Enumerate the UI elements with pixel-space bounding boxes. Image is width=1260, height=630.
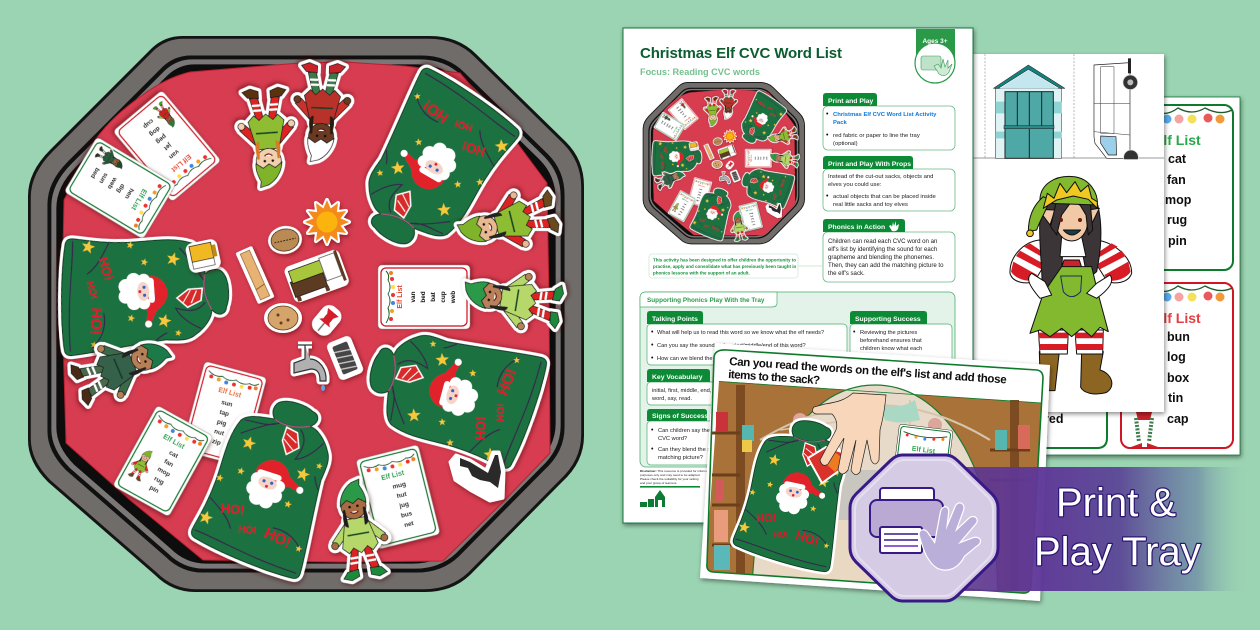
- elf: red tunic: [292, 62, 352, 163]
- activity question: Can you read the words on the elf's list and add those: [729, 355, 1008, 386]
- age badge: Ages 3+: [922, 38, 948, 45]
- panel: phonics in action: Then, they can add the matching picture to: [828, 262, 944, 269]
- disclaimer text: Please check the suitability for your setting: [640, 477, 699, 481]
- sack in scene: HO!: [794, 527, 821, 549]
- sack: left: [56, 228, 232, 356]
- panel: supporting success: children know what each: [860, 346, 922, 352]
- elf list card: red, horizontal: [378, 265, 470, 329]
- panel: talking points: •: [651, 329, 654, 336]
- elf list card: green, top left: dig: [115, 182, 126, 194]
- panel: signs of success: •: [651, 446, 654, 453]
- elf list card: red, top left: Elf List: [169, 152, 192, 173]
- sack: bottom: HO!: [261, 525, 294, 552]
- back page: elf list cards: [1000, 97, 1240, 455]
- disclaimer text: purposes only and may need to be adapted.: [640, 473, 701, 477]
- panel: signs of success: Can children say the sounds in each: [658, 428, 750, 434]
- elf list card: green, bottom right: jug: [398, 501, 410, 510]
- sack: right lower: [356, 316, 549, 472]
- elf list card: red, behind bottom sack: pig: [216, 419, 227, 428]
- elf list card: green, top left: bed: [89, 166, 101, 180]
- title: Christmas Elf CVC Word List: [640, 45, 842, 62]
- elf list card: red, behind bottom sack: tap: [219, 409, 230, 418]
- elf list card: red: Elf List: [1154, 310, 1201, 326]
- panel: key vocabulary: [647, 369, 847, 405]
- panel: supporting success: beforehand ensures that: [860, 338, 922, 344]
- elf list card: green, bottom right: net: [404, 520, 415, 529]
- panel: talking points: What will help us to read this word so we know what the elf needs?: [657, 330, 824, 336]
- panel: print and play: Christmas Elf CVC Word List Activity: [833, 112, 937, 118]
- sack: right lower: HO!: [495, 403, 507, 422]
- panel: key vocabulary: Key Vocabulary: [652, 374, 703, 381]
- disclaimer text: [640, 469, 713, 488]
- activity frame outline: [707, 350, 1043, 593]
- panel: supporting phonics play: Supporting Phonics Play With the Tray: [647, 297, 765, 304]
- elf list card: red: bun: [1167, 330, 1190, 344]
- elf list card: green, partly hidden: [1040, 400, 1107, 448]
- panel: print and play with props: Instead of the cut-out sacks, objects and: [828, 174, 933, 180]
- panel: phonics in action: the elf's sack.: [828, 270, 865, 277]
- elf list card: red, horizontal: Elf List: [397, 285, 404, 309]
- elf list card: green: rug: [1167, 213, 1187, 227]
- red fabric lining: [62, 62, 550, 562]
- panel: signs of success: Signs of Success: [652, 413, 709, 420]
- panel: signs of success: •: [651, 427, 654, 434]
- icon: bread roll: [266, 223, 304, 257]
- elf list card: green, top left: [64, 137, 176, 239]
- elf list card: green, bottom left: cat: [168, 449, 180, 460]
- panel: phonics in action: [823, 219, 955, 282]
- panel: talking points: [647, 311, 847, 365]
- elf list card: green: fan: [1167, 173, 1186, 187]
- elf list card: red: cap: [1167, 412, 1189, 426]
- elf list card: red, top left: jet: [162, 141, 173, 152]
- icon: red pin: [308, 301, 345, 339]
- banner: [950, 467, 1260, 591]
- elf list card: green, top left: sun: [97, 171, 109, 185]
- panel: supporting success: •: [853, 329, 856, 336]
- elf list card: green, bottom left: rug: [153, 475, 165, 487]
- panel: phonics in action: Phonics in Action: [828, 224, 885, 231]
- elf: dark green outfit: [66, 321, 179, 413]
- icon: sun: [305, 200, 349, 244]
- panel: print and play with props: actual objects that can be placed inside: [833, 194, 937, 200]
- elf list card: red, behind bottom sack: nut: [213, 428, 225, 438]
- logo: [640, 490, 665, 507]
- sack: right lower: HO!: [494, 366, 520, 398]
- elf list card: green, bottom left: fan: [163, 458, 174, 469]
- sack in scene: HO!: [773, 529, 789, 539]
- elf: red collar, bottom: [321, 476, 394, 583]
- elf list card: green: [1030, 105, 1233, 270]
- banner title: [1034, 481, 1201, 574]
- elf list card: green, top left: hen: [123, 187, 135, 200]
- elf list card: green, bottom left: pin: [148, 484, 160, 495]
- panel: print and play with props: •: [826, 193, 829, 200]
- panel: print and play with props: [823, 156, 955, 211]
- panel: print and play: Pack: [833, 120, 847, 126]
- elf list card: green, bottom right: Elf List: [381, 470, 406, 482]
- elf list card: red, behind bottom sack: sun: [220, 399, 233, 409]
- panel: talking points: •: [651, 342, 654, 349]
- panel: signs of success: matching picture?: [658, 455, 703, 461]
- panel: talking points: Talking Points: [652, 316, 698, 323]
- tray frame: [28, 36, 584, 592]
- icon: teal building: [993, 65, 1065, 158]
- elf list card in scene: Elf List: [911, 446, 936, 456]
- elf list card: red: [1121, 283, 1233, 448]
- elf list card: green, bottom right: [356, 445, 440, 549]
- tray with printed activity pieces: [28, 36, 584, 592]
- panel: supporting phonics play: [640, 292, 955, 467]
- disclaimer text: and your group of learners.: [640, 481, 677, 485]
- elf list card: red, horizontal: bed: [420, 291, 427, 303]
- sack: top right: HO!: [454, 117, 474, 133]
- sack: top right: HO!: [460, 138, 487, 160]
- panel: print and play with props: Print and Play With Props: [828, 161, 911, 168]
- elf list card: green, bottom left: mop: [156, 466, 171, 479]
- elf list card: red: box: [1167, 371, 1189, 385]
- activity question: items to the sack?: [728, 368, 820, 387]
- icon: bin: [325, 335, 365, 381]
- activity photo card: [700, 343, 1050, 601]
- main document page: [623, 28, 973, 523]
- sack: left: HO!: [95, 255, 117, 282]
- panel: print and play: Print and Play: [828, 98, 874, 105]
- icon: bed: [283, 248, 350, 304]
- icon: yellow mug: [184, 238, 222, 274]
- panel: phonics in action: grapheme and blending the phonemes.: [828, 254, 934, 261]
- elf list card: red, top left: van: [167, 148, 180, 160]
- sack: bottom: [187, 384, 350, 581]
- age badge: [915, 29, 955, 83]
- elf list card: red, top left: dog: [148, 125, 161, 138]
- elf list card: red, horizontal: web: [450, 291, 457, 304]
- elf list card: red, behind bottom sack: zip: [211, 438, 222, 447]
- panel: talking points: How can we blend the sounds?: [657, 356, 735, 362]
- elf list card: green, top left: Elf List: [129, 187, 147, 211]
- elf: green tunic: [235, 86, 299, 189]
- elf list card: green: mop: [1165, 193, 1192, 207]
- icon: van: [1094, 58, 1140, 168]
- elf list card: red, horizontal: van: [410, 291, 417, 303]
- panel: print and play: [823, 93, 955, 150]
- panel: print and play: red fabric or paper to line the tray: [833, 133, 920, 139]
- elf: long dark hair: [453, 183, 562, 262]
- elf list card: red, horizontal: cup: [440, 291, 447, 303]
- elf: green hat with red collar: [459, 264, 566, 336]
- panel: key vocabulary: initial, first, middle, end, last, sound, blend,: [652, 388, 760, 394]
- elf list card: red, behind bottom sack: [181, 361, 267, 467]
- panel: supporting success: [850, 311, 952, 465]
- elf list card: red, horizontal: bat: [430, 291, 437, 302]
- mini tray photo: [643, 82, 805, 244]
- elf list card: green: Elf List: [1154, 132, 1201, 148]
- elf list card: green, bottom right: bus: [400, 510, 413, 520]
- panel: talking points: Can you say the sound at the start/middle/end of this word?: [657, 343, 806, 349]
- elf list card: green, bottom left: [113, 405, 213, 517]
- sack: left: HO!: [87, 307, 105, 335]
- note: activity purpose: This activity has been designed to offer children the opportunity to: [653, 258, 796, 262]
- sack: left: HO!: [84, 280, 100, 301]
- icon: printer: [870, 488, 943, 553]
- elf list card: green: cat: [1168, 152, 1187, 166]
- panel: print and play: •: [826, 111, 829, 118]
- sack: bottom: HO!: [238, 524, 257, 537]
- cat: [450, 452, 504, 501]
- banner title: Print &: [1056, 481, 1176, 525]
- icon: water tap: [294, 345, 326, 391]
- panel: key vocabulary: word, say, read.: [651, 396, 692, 402]
- elf list card: green, bottom right: mug: [392, 481, 407, 491]
- panel: supporting success: Supporting Success: [855, 316, 921, 323]
- elf list card: green: pin: [1168, 234, 1187, 248]
- banner title: Play Tray: [1034, 530, 1201, 574]
- elf list card: red, top left: peg: [154, 132, 168, 145]
- panel: print and play: (optional): [833, 141, 858, 147]
- panel: signs of success: Can they blend the sounds and find the: [658, 447, 757, 453]
- note: activity purpose: [649, 254, 823, 278]
- panel: talking points: •: [651, 355, 654, 362]
- elf list card: red, behind bottom sack: Elf List: [217, 387, 242, 400]
- sack in scene: [730, 418, 846, 575]
- panel: print and play with props: elves you could use:: [828, 182, 882, 188]
- icon: cookie: [264, 303, 302, 333]
- workshop background: [705, 381, 1042, 600]
- frame and scene: [708, 381, 1041, 592]
- hand: [812, 393, 886, 475]
- panel: supporting success: Reviewing the pictures: [860, 330, 917, 336]
- elf list card in scene: [895, 424, 953, 456]
- panel: phonics in action: elf's list by identifying the sound for each: [828, 246, 937, 253]
- note: activity purpose: practise, apply and consolidate what has previously been taught in: [653, 264, 797, 269]
- sack: top right: HO!: [420, 96, 452, 126]
- big elf character: [1010, 176, 1132, 394]
- elf list card: red, top left: cup: [141, 117, 155, 130]
- panel: signs of success: CVC word?: [658, 436, 687, 442]
- subtitle: Focus: Reading CVC words: [640, 67, 760, 77]
- elf list card: green, partly hidden: red: [1044, 412, 1063, 426]
- sack: top right: [340, 65, 526, 270]
- sack: right lower: HO!: [473, 416, 488, 440]
- panel: phonics in action: Children can read each CVC word on an: [828, 238, 937, 245]
- elf list card: green, bottom left: Elf List: [162, 433, 186, 451]
- sack in scene: HO!: [756, 513, 777, 525]
- elf list card: green, top left: web: [106, 175, 119, 190]
- panel: print and play with props: real little sacks and toy elves: [833, 202, 908, 208]
- icon: hand: [920, 503, 980, 570]
- panel: print and play: •: [826, 132, 829, 139]
- disclaimer text: Disclaimer: This resource is provided for information: [640, 469, 713, 473]
- sack: bottom: HO!: [220, 501, 245, 518]
- panel: signs of success: [647, 409, 847, 465]
- back page: cut-out building, van and elf: [950, 54, 1164, 412]
- icon: wooden plank: [235, 246, 275, 304]
- picture being added to sack: [808, 447, 845, 483]
- print and play badge: [850, 455, 998, 601]
- elf list card: green, bottom right: hut: [396, 491, 408, 500]
- elf list card: red, top left: [113, 90, 221, 202]
- elf list card: red: log: [1167, 350, 1186, 364]
- note: activity purpose: phonics lessons with the support of an adult.: [653, 270, 750, 276]
- elf list card: red: tin: [1168, 391, 1183, 405]
